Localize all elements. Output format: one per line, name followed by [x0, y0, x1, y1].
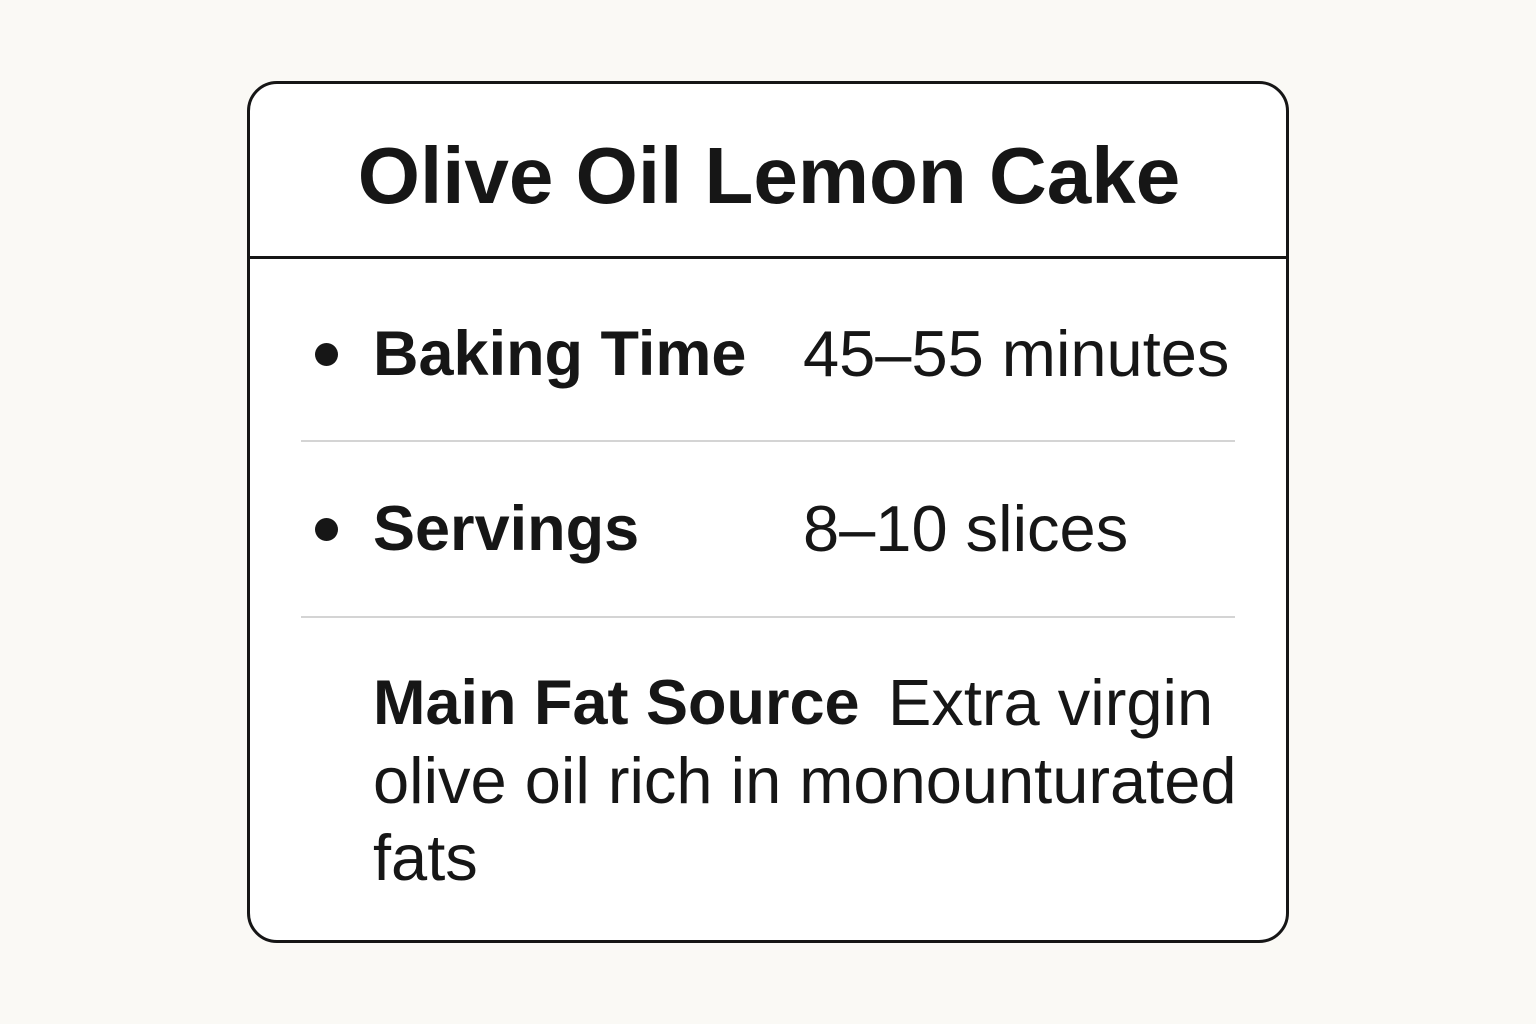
row: servings: [315, 492, 1128, 565]
row: main fat source: [373, 666, 1237, 894]
value: 8–10 slices: [803, 492, 1128, 565]
bullet: [315, 343, 338, 366]
value: 45–55 minutes: [803, 317, 1229, 390]
label: Baking Time: [373, 319, 746, 389]
header divider: [250, 256, 1286, 259]
value text: olive oil rich in monounturated: [373, 744, 1237, 817]
value text: Extra virgin: [888, 666, 1213, 739]
value text: fats: [373, 821, 478, 894]
title: Olive Oil Lemon Cake: [358, 131, 1180, 220]
label: Main Fat Source: [373, 668, 860, 738]
bullet: [315, 518, 338, 541]
value text: [373, 666, 1237, 894]
row: baking time: [315, 317, 1229, 390]
label: Servings: [373, 494, 639, 564]
panel: recipe card: [247, 81, 1289, 943]
